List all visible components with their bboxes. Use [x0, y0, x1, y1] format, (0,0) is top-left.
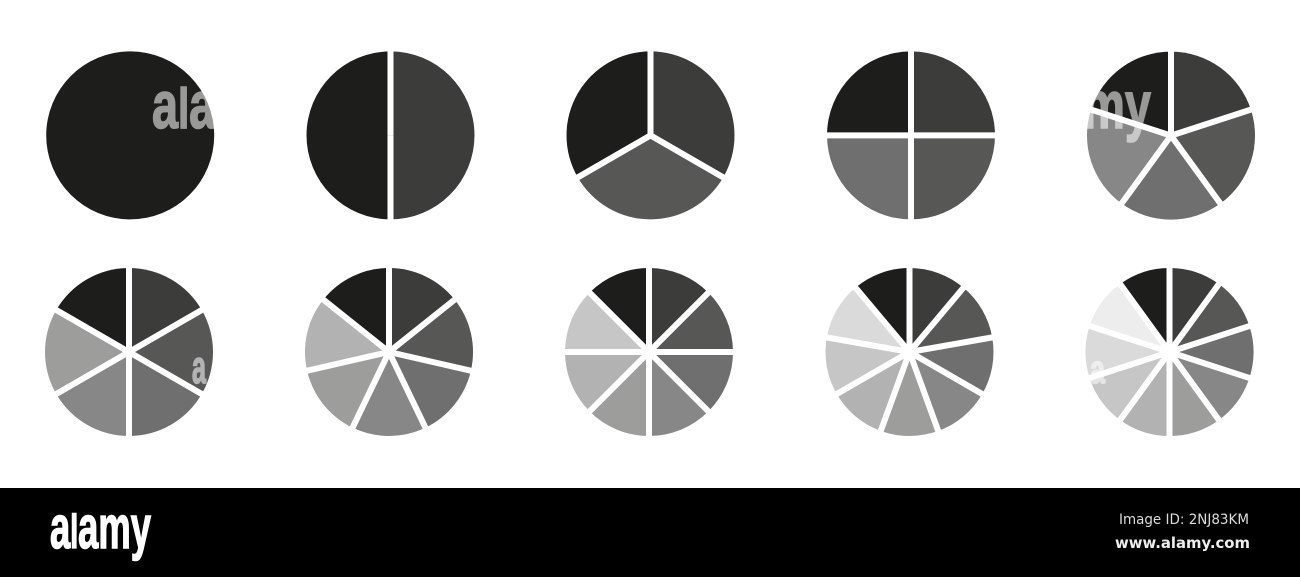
- slice 6 of 9: [830, 334, 910, 431]
- slice 2 of 8: [649, 293, 750, 394]
- slice 3 of 10: [1170, 326, 1265, 399]
- slice 3 of 4: [827, 135, 911, 219]
- slice 5 of 7: [293, 324, 389, 428]
- slice 8 of 9: [827, 284, 919, 352]
- slice 9 of 10: [1090, 279, 1185, 352]
- slice 3 of 7: [374, 352, 471, 435]
- pie: 9 segments: [810, 253, 1005, 449]
- slice 6 of 7: [292, 288, 389, 371]
- slice 1 of 2: [390, 51, 474, 219]
- watermark: top-row alamy over pie 1: alamy: [152, 68, 283, 143]
- image id: Image ID: 2NJ83KM: [1119, 512, 1249, 528]
- slice 2 of 6: [129, 310, 238, 415]
- slice 2 of 3: [572, 114, 723, 250]
- slice 4 of 4: [827, 51, 911, 135]
- footer bar: [0, 488, 1300, 577]
- slice 3 of 5: [1106, 136, 1220, 251]
- pie: 8 segments: [548, 251, 750, 453]
- slice 3 of 8: [649, 352, 733, 411]
- pie: 10 segments: [1074, 255, 1265, 449]
- slice 9 of 9: [856, 253, 951, 352]
- slice 1 of 3: [650, 51, 734, 177]
- slice 5 of 6: [20, 289, 129, 394]
- slice 3 of 6: [93, 352, 202, 457]
- slice 1 of 7: [389, 268, 455, 352]
- slice 4 of 6: [56, 352, 129, 436]
- slice 1 of 8: [649, 268, 708, 352]
- pie: 3 segments: [536, 42, 734, 250]
- slice 1 of 6: [129, 268, 202, 352]
- pie: 2 segments: [306, 45, 474, 225]
- pie: 6 segments: [20, 247, 238, 457]
- slice 6 of 10: [1120, 352, 1170, 436]
- slice 4 of 5: [1057, 89, 1171, 204]
- slice 7 of 10: [1080, 323, 1170, 420]
- slice 8 of 10: [1074, 305, 1170, 378]
- website: www.alamy.com: [1115, 534, 1250, 552]
- slice 4 of 10: [1154, 352, 1249, 425]
- watermark: top-row alamy over pie 5: alamy: [1020, 68, 1151, 143]
- slice 2 of 5: [1171, 110, 1276, 212]
- slice 5 of 8: [590, 352, 649, 436]
- slice 1 of 5: [1171, 52, 1251, 136]
- watermark: letter over pie 10: a: [1090, 348, 1106, 392]
- slice 7 of 7: [323, 248, 430, 352]
- slice 7 of 9: [810, 305, 910, 394]
- slice 1 of 4: [911, 51, 995, 135]
- pie: 4 segments: [821, 45, 1001, 225]
- slice 2 of 2: [306, 51, 390, 219]
- slice 1 of 9: [910, 268, 963, 352]
- slice 2 of 10: [1170, 284, 1259, 381]
- slice 2 of 4: [911, 135, 995, 219]
- slice 4 of 8: [607, 352, 708, 453]
- slice 7 of 8: [565, 293, 649, 352]
- slice 2 of 9: [910, 288, 1005, 387]
- slice 1 of 10: [1170, 268, 1219, 352]
- pie: 7 segments: [292, 248, 496, 456]
- pie: 1 segment: [46, 51, 214, 219]
- slice 8 of 8: [590, 251, 691, 352]
- slice 4 of 9: [883, 352, 982, 441]
- slice 6 of 8: [548, 310, 649, 411]
- slice 10 of 10: [1120, 255, 1209, 352]
- slice 2 of 7: [389, 300, 496, 403]
- pie: 5 segments: [1057, 34, 1276, 251]
- slice 3 of 3: [536, 42, 687, 177]
- slice 5 of 5: [1091, 34, 1196, 136]
- slice 3 of 9: [910, 337, 1002, 405]
- footer logo: alamy: [50, 494, 151, 561]
- slice 5 of 10: [1130, 352, 1219, 449]
- watermark: letter over pie 6: a: [192, 341, 206, 393]
- slice 4 of 7: [330, 352, 425, 456]
- slice 6 of 6: [56, 247, 165, 352]
- slice 5 of 9: [859, 352, 938, 449]
